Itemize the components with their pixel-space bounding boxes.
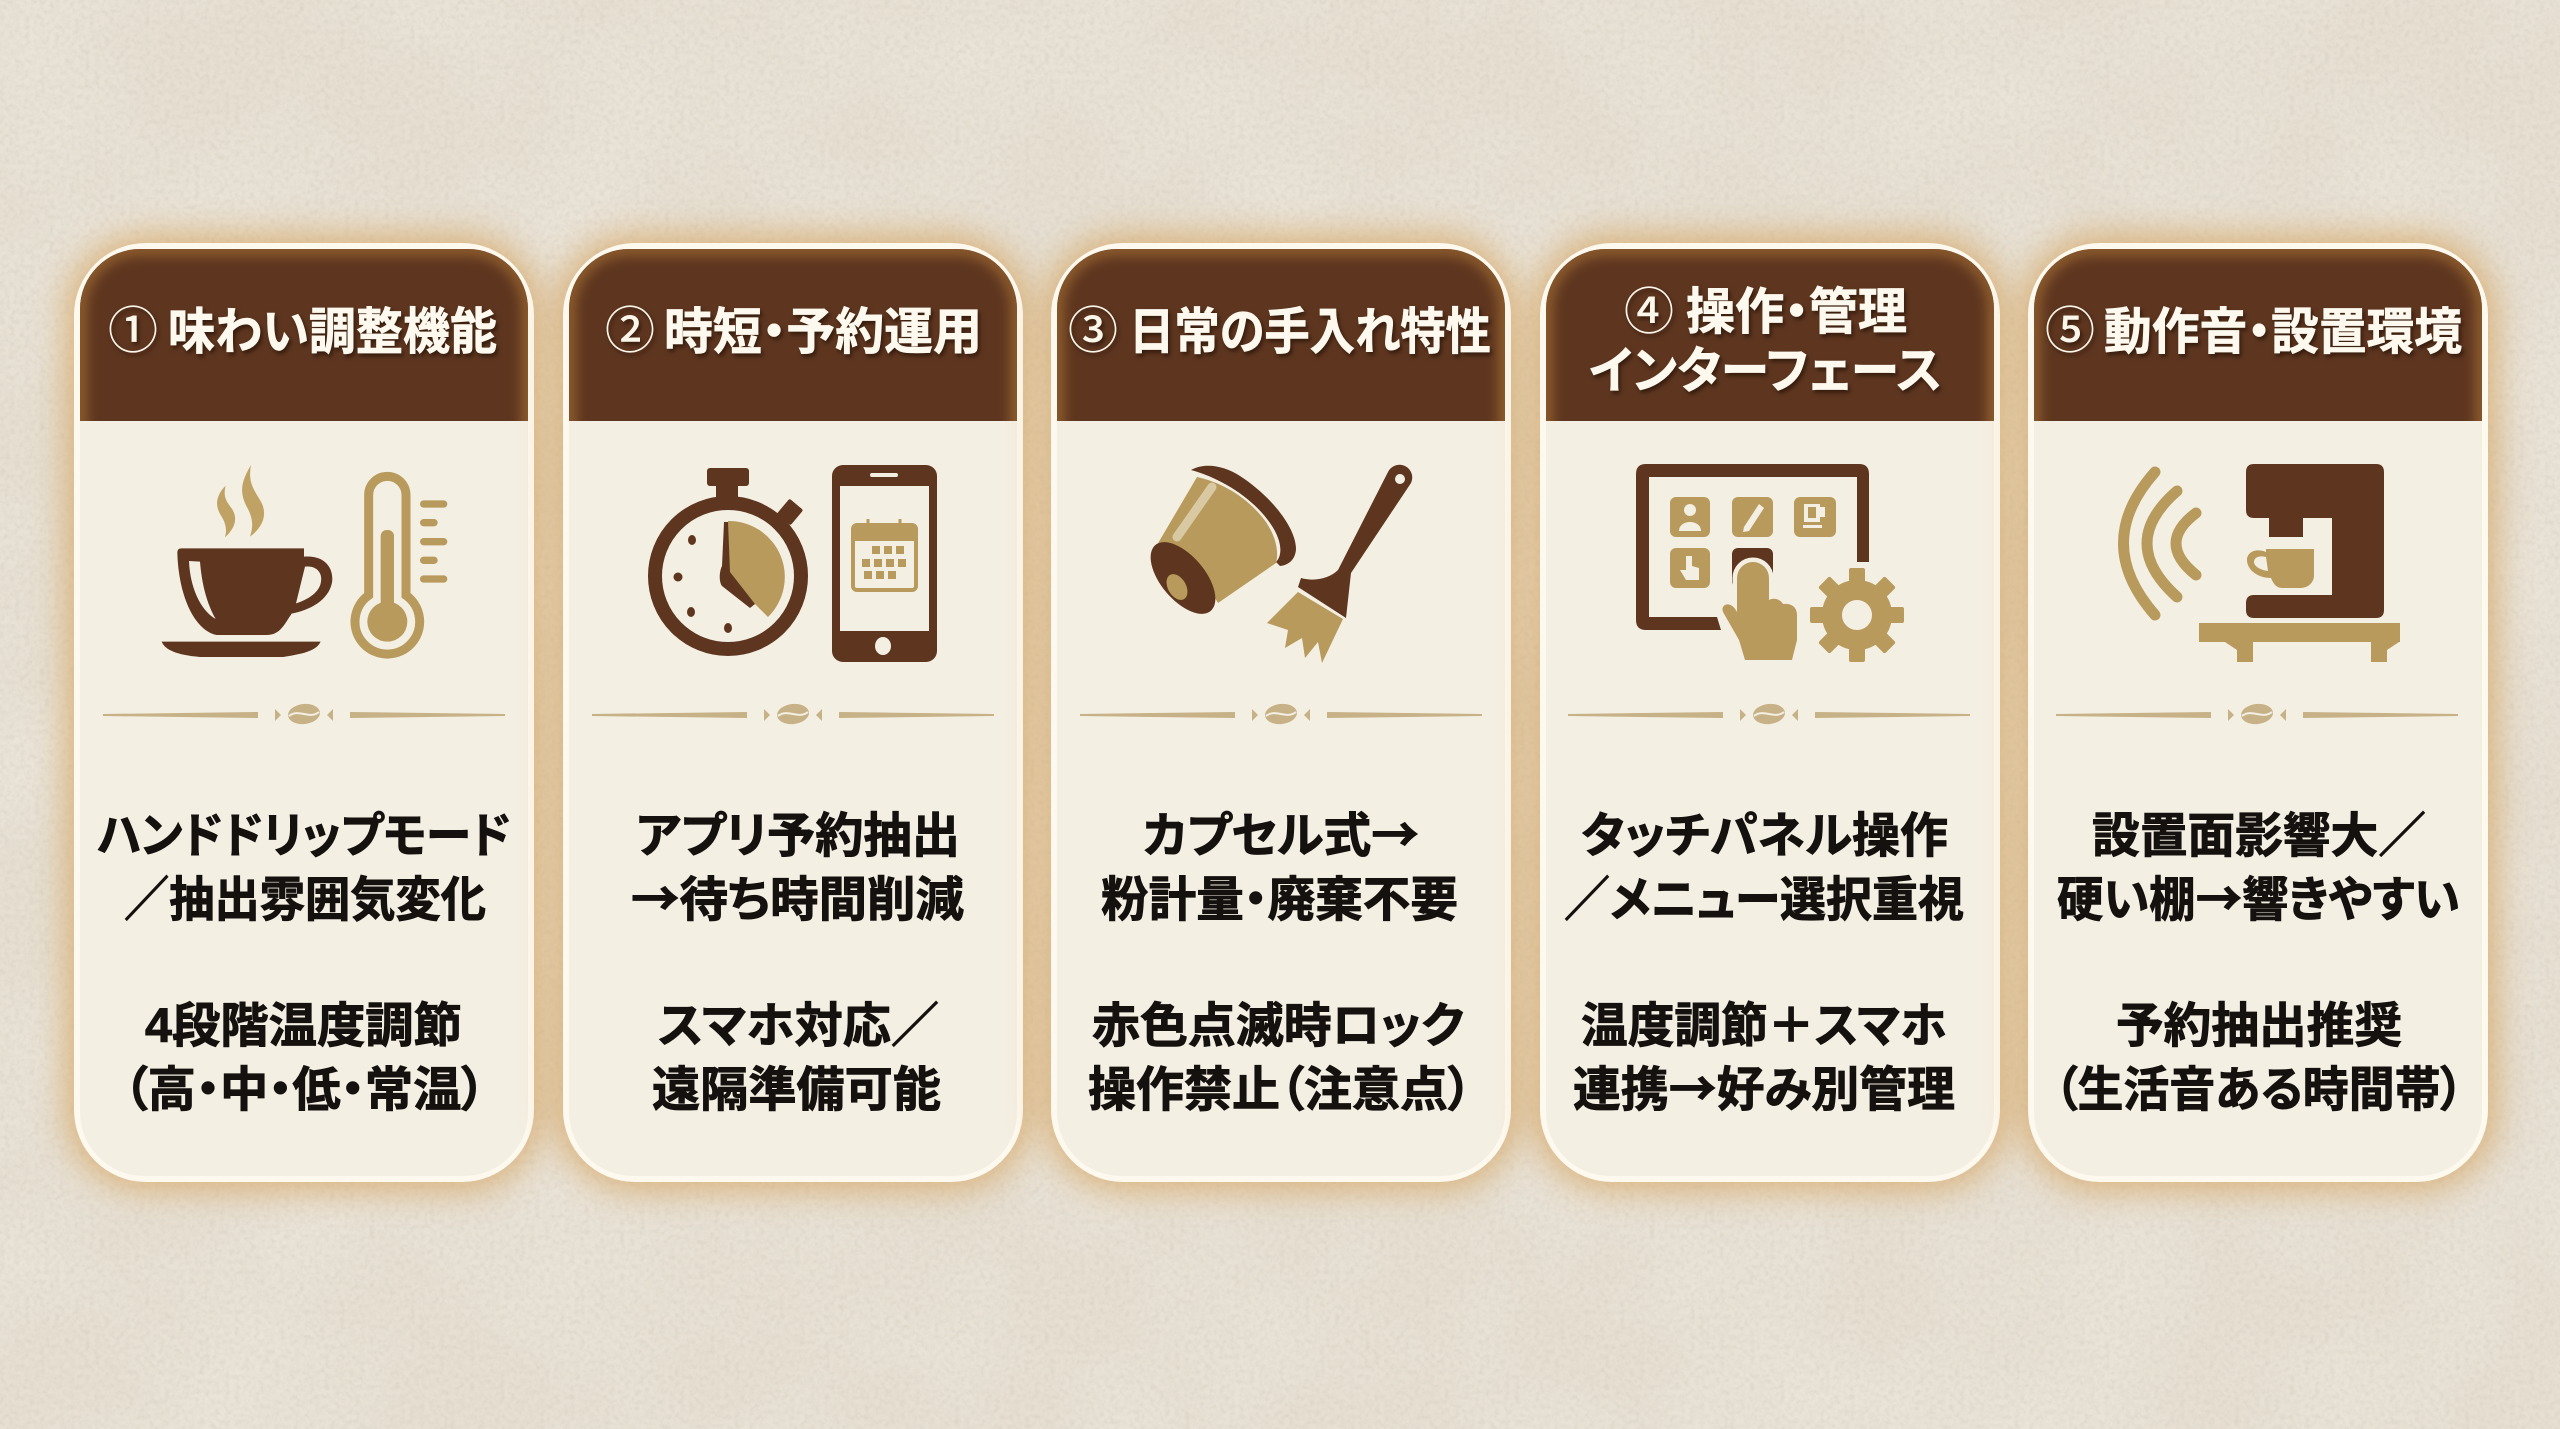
body text: [1564, 810, 1964, 1120]
heading: ⑤: [2045, 303, 2095, 359]
body text: （生活音ある時間帯）: [2054, 1064, 2464, 1117]
heading: ③: [1068, 303, 1118, 359]
body text: 遠隔準備可能: [652, 1064, 941, 1117]
body text: 予約抽出推奨: [2116, 1000, 2402, 1053]
body text: [2054, 810, 2464, 1117]
body text: [97, 810, 511, 1117]
body text: [631, 810, 964, 1117]
panel: 操作・管理インターフェース: [1532, 235, 2008, 1190]
body text: ハンドドリップモード: [97, 810, 511, 863]
heading: 操作・管理: [1686, 284, 1907, 340]
body text: →待ち時間削減: [631, 860, 964, 930]
body text: 操作禁止（注意点）: [1088, 1064, 1472, 1117]
divider with coffee bean: [2056, 702, 2458, 726]
body text: [1088, 796, 1472, 1117]
body text: （高・中・低・常温）: [124, 1064, 486, 1117]
body text: ／メニュー選択重視: [1564, 874, 1964, 927]
body text: 設置面影響大／: [2092, 810, 2426, 863]
icon: capsule and brush: [1139, 465, 1412, 663]
body text: ／抽出雰囲気変化: [124, 874, 486, 927]
body text: 4段階温度調節: [145, 1000, 462, 1053]
heading: [1589, 284, 1942, 399]
divider with coffee bean: [1568, 702, 1970, 726]
icon: coffee cup and thermometer: [162, 465, 447, 657]
body text: 温度調節＋スマホ: [1581, 1000, 1947, 1053]
divider with coffee bean: [103, 702, 505, 726]
body text: スマホ対応／: [658, 1000, 939, 1053]
body text: 赤色点滅時ロック: [1092, 1000, 1464, 1053]
body text: 連携→好み別管理: [1573, 1050, 1955, 1120]
heading: 時短・予約運用: [664, 304, 982, 360]
panel: 味わい調整機能: [66, 235, 542, 1190]
body text: 粉計量・廃棄不要: [1101, 874, 1458, 927]
panel: 動作音・設置環境: [2020, 235, 2496, 1190]
heading: 日常の手入れ特性: [1129, 304, 1491, 360]
heading: 味わい調整機能: [168, 304, 497, 360]
icon: stopwatch and smartphone: [655, 465, 937, 662]
heading: インターフェース: [1589, 343, 1942, 399]
body text: カプセル式→: [1143, 796, 1419, 866]
heading: ②: [605, 303, 655, 359]
panel: 時短・予約運用: [555, 235, 1031, 1190]
icon: coffee machine, sound waves and shelf: [2124, 464, 2400, 662]
divider with coffee bean: [592, 702, 994, 726]
body text: アプリ予約抽出: [636, 810, 960, 863]
body text: タッチパネル操作: [1581, 810, 1948, 863]
heading: ①: [108, 303, 158, 359]
panel: 日常の手入れ特性: [1043, 235, 1519, 1190]
icon: touch panel, hand and gear: [1636, 464, 1904, 662]
divider with coffee bean: [1080, 702, 1482, 726]
body text: 硬い棚→響きやすい: [2057, 860, 2460, 930]
heading: ④: [1624, 284, 1674, 340]
heading: 動作音・設置環境: [2104, 304, 2462, 360]
